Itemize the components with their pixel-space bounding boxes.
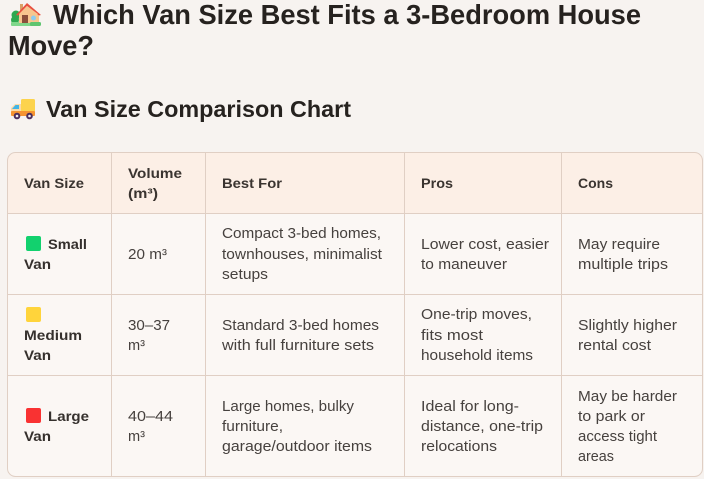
row: small van: Small xyxy=(48,236,87,252)
row: medium van: fits most xyxy=(421,328,483,344)
icon: yellow square xyxy=(26,307,41,322)
row: small van: Compact 3-bed homes, xyxy=(222,226,381,242)
row: large van: Large homes, bulky xyxy=(222,399,355,415)
title: Move? xyxy=(8,30,94,61)
header row: (m³) xyxy=(128,185,158,201)
row: small van: Van xyxy=(24,256,51,272)
row: large van: Ideal for long- xyxy=(421,399,519,415)
row: small van: May require xyxy=(578,237,660,253)
row: large van: garage/outdoor items xyxy=(222,439,372,455)
row: large van: Large xyxy=(48,408,89,424)
row: small van: Lower cost, easier xyxy=(421,237,549,253)
header row: Cons xyxy=(578,175,613,191)
row: small van xyxy=(24,226,668,283)
header row: Volume xyxy=(128,165,182,181)
table header background xyxy=(8,152,702,214)
row: medium van: household items xyxy=(421,348,533,364)
row: large van: relocations xyxy=(421,439,497,455)
table background xyxy=(8,152,702,476)
row: small van: to maneuver xyxy=(421,257,507,273)
row: large van: furniture, xyxy=(222,419,283,435)
row: large van: distance, one-trip xyxy=(421,419,543,435)
icon: green square xyxy=(26,236,41,251)
section heading: Van Size Comparison Chart xyxy=(46,96,351,122)
header row: Pros xyxy=(421,175,453,191)
row: large van: m³ xyxy=(128,429,145,445)
icon: red square xyxy=(26,408,41,423)
row: large van: May be harder xyxy=(578,389,677,405)
comparison table xyxy=(8,152,702,476)
row: medium van: Slightly higher xyxy=(578,318,677,334)
row: small van: townhouses, minimalist xyxy=(222,247,382,263)
icon: delivery truck emoji xyxy=(11,99,35,119)
row: large van: 40–44 xyxy=(128,409,173,425)
row: large van: access tight xyxy=(578,429,657,445)
title xyxy=(8,0,641,61)
row: medium van: rental cost xyxy=(578,338,651,354)
row: medium van: One-trip moves, xyxy=(421,307,532,323)
row: medium van: Standard 3-bed homes xyxy=(222,318,379,334)
row: medium van: Medium xyxy=(24,327,82,343)
row: medium van: m³ xyxy=(128,338,145,354)
header row: Van Size xyxy=(24,175,84,191)
row: large van: areas xyxy=(578,449,614,465)
row: small van: setups xyxy=(222,267,268,283)
row: medium van xyxy=(24,307,677,364)
row: medium van: 30–37 xyxy=(128,318,170,334)
row: large van: Van xyxy=(24,428,51,444)
header row xyxy=(24,165,613,201)
row: medium van: Van xyxy=(24,347,51,363)
row: large van xyxy=(24,389,677,465)
row: large van: to park or xyxy=(578,409,645,425)
row: small van: 20 m³ xyxy=(128,247,167,263)
header row: Best For xyxy=(222,175,283,191)
row: small van: multiple trips xyxy=(578,257,668,273)
icon: house emoji xyxy=(11,3,41,26)
row: medium van: with full furniture sets xyxy=(221,338,374,354)
